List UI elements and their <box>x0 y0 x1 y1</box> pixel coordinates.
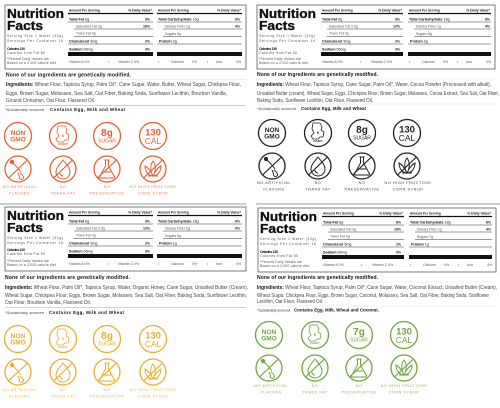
nutrition facts label: % Daily Value* <box>467 212 492 216</box>
icon captions: PRESERVATIVE <box>89 394 125 398</box>
ingredients: Ingredients: Wheat Flour, Tapioca Syrup, Palm Oil*, Cane Sugar, Water, Butter, Wheat Sugar, Chickpea Flour, <box>6 82 241 88</box>
gmo statement: None of our ingredients are genetically modified. <box>257 275 379 281</box>
icon captions <box>254 384 427 394</box>
nutrition facts label: • <box>361 263 363 267</box>
ingredients <box>5 282 248 308</box>
nutrition facts label: Vitamin A 0% <box>69 60 90 64</box>
icon row: certifications: 8g <box>356 125 368 136</box>
nutrition facts label: Calories from Fat 50 <box>7 252 45 256</box>
nutrition facts label: 0% <box>236 262 241 266</box>
icon row: certifications <box>4 122 166 150</box>
nutrition facts label: 6% <box>486 220 492 224</box>
icon row: certifications: K <box>62 134 65 138</box>
ingredients: Ingredients: Wheat Flour, Palm Oil*, Tapioca Syrup, Water, Organic Honey, Cane Sugar, Unsalted Butter (Cream), <box>5 285 248 291</box>
nutrition facts label: Total Fat 6g <box>69 18 89 22</box>
nutrition facts label: Dietary Fiber 1g <box>416 24 441 28</box>
nutrition facts label: Total Carbohydrate 18g <box>158 220 199 224</box>
icon row: certifications: K <box>314 333 317 337</box>
nutrition facts label: Cholesterol 5mg <box>323 242 352 246</box>
nutrition facts label: • <box>207 262 209 266</box>
nutrition facts label: Vitamin A 0% <box>69 262 90 266</box>
nutrition facts label: 9% <box>395 18 401 22</box>
icon row: certifications: DAIRY <box>313 139 323 143</box>
allergen statement: *Sustainably sourced <box>257 106 297 111</box>
nutrition facts label: Iron <box>216 262 222 266</box>
allergen statement: Contains Egg, Milk, Wheat and Coconut. <box>294 308 379 312</box>
icon row: certifications: GMO <box>10 340 26 346</box>
icon row: certifications: 7g <box>353 327 365 338</box>
icon captions: PRESERVATIVE <box>89 192 125 196</box>
nutrition facts label <box>5 5 246 69</box>
gmo statement: None of our ingredients are genetically modified. <box>6 72 132 78</box>
nutrition facts label: Trans Fat 0g <box>329 32 349 36</box>
nutrition facts label: Calories from Fat 50 <box>259 51 297 55</box>
nutrition facts label: 0% <box>443 60 448 64</box>
icon captions: NO HIGH FRUCTOSE <box>381 384 427 388</box>
gmo statement: None of our ingredients are genetically modified. <box>5 275 131 281</box>
icon captions: NO ARTIFICIAL <box>2 185 37 189</box>
nutrition facts label: Nutrition <box>259 6 316 21</box>
nutrition facts label: Servings Per Container 16 <box>259 39 315 43</box>
nutrition facts label: % Daily Value* <box>217 210 242 214</box>
ingredients <box>5 80 246 106</box>
nutrition facts label: • <box>410 263 412 267</box>
nutrition facts label: 4% <box>486 60 491 64</box>
nutrition facts label: Dietary Fiber 0g <box>165 226 190 230</box>
nutrition facts label: Serving Size 1 Wafer (33g) <box>7 34 63 38</box>
nutrition facts label: Sodium 85mg <box>323 250 347 254</box>
icon captions: CORN SYRUP <box>393 188 423 192</box>
nutrition facts label: Nutrition <box>260 209 317 224</box>
allergen statement <box>5 310 125 315</box>
icon row: certifications: K <box>62 337 65 341</box>
ingredients <box>257 79 499 104</box>
icon row: certifications: 130 <box>145 128 161 138</box>
nutrition facts label: Cholesterol 5mg <box>322 40 350 44</box>
nutrition facts label: 3% <box>395 48 401 52</box>
allergen statement: Contains Egg, Milk and Wheat <box>301 106 367 111</box>
nutrition facts label: Facts <box>7 18 43 33</box>
nutrition facts label: Calories from Fat 80 <box>7 51 45 55</box>
nutrition facts label: • <box>207 60 209 64</box>
nutrition facts label <box>258 208 496 272</box>
nutrition facts label: Amount Per Serving <box>409 8 440 12</box>
nutrition facts label: Calcium <box>171 60 184 64</box>
icon captions: NO <box>104 185 110 189</box>
nutrition facts label: Based on a 2,000 calorie diet. <box>7 61 57 65</box>
panel: bottom-left yellow nutrition facts <box>2 207 248 398</box>
nutrition facts label: Based on a 2,000 calorie diet. <box>259 61 309 65</box>
ingredients: Wheat Sugar, Chickpea Flour, Eggs, Brown Sugar, Molasses, Sea Salt, Oat Fiber, Baking Soda, Sunflower Lecithin, <box>5 293 247 299</box>
nutrition facts label: Amount Per Serving <box>69 8 100 12</box>
nutrition facts label: Total Fat 6g <box>322 18 342 22</box>
icon row: certifications: GMO <box>261 336 277 342</box>
nutrition facts label: Saturated Fat 3g <box>76 24 102 28</box>
icon row: certifications: 8g <box>101 331 113 342</box>
nutrition facts label: Sugars 8g <box>165 234 181 238</box>
nutrition facts label: 8% <box>396 220 402 224</box>
nutrition facts label: Vitamin C 0% <box>118 262 139 266</box>
nutrition facts label: 16% <box>143 24 151 28</box>
icon row: certifications: SUGAR <box>98 342 116 348</box>
nutrition facts label: Saturated Fat 3g <box>330 228 356 232</box>
icon captions: TRANS FAT <box>302 390 328 394</box>
nutrition facts label: 13% <box>393 24 401 28</box>
icon row: certifications: DAIRY <box>58 345 68 349</box>
nutrition facts label: Serving Size 1 Wafer (33g) <box>260 237 316 241</box>
icon captions <box>257 181 431 192</box>
icon captions: NO <box>315 181 321 185</box>
icon captions: FLAVORS <box>9 394 30 398</box>
nutrition facts label: Vitamin C 0% <box>118 60 139 64</box>
icon captions: NO ARTIFICIAL <box>2 388 37 392</box>
nutrition facts label: Trans Fat 0g <box>330 234 350 238</box>
nutrition facts label: Nutrition <box>7 6 64 21</box>
icon captions: NO <box>312 384 318 388</box>
nutrition facts label: 13% <box>143 226 151 230</box>
icon captions: CORN SYRUP <box>138 192 168 196</box>
icon row: certifications: CAL <box>145 136 162 146</box>
nutrition facts label: Amount Per Serving <box>158 210 189 214</box>
icon captions: NO <box>60 388 66 392</box>
nutrition facts label: 3% <box>145 48 151 52</box>
ingredients: Oat Flour, Bourbon Vanilla, Flaxseed Oil. <box>5 300 91 306</box>
nutrition facts label: Calcium <box>423 263 436 267</box>
nutrition facts label <box>257 5 495 69</box>
icon captions: NO <box>104 388 110 392</box>
nutrition facts label: • <box>158 262 160 266</box>
icon captions: FLAVORS <box>9 192 30 196</box>
nutrition facts label: Saturated Fat 2.5g <box>76 226 105 230</box>
ingredients <box>257 282 497 306</box>
nutrition facts label: Protein 2g <box>159 40 177 44</box>
nutrition facts label <box>5 207 246 271</box>
nutrition facts label: 2% <box>395 40 401 44</box>
nutrition facts label: Sugars 7g <box>417 235 433 239</box>
icon row: certifications: GMO <box>10 136 26 144</box>
nutrition facts label: Servings Per Container 16 <box>7 241 63 245</box>
nutrition facts label: Sodium 65mg <box>322 48 346 52</box>
icon captions: NO <box>60 185 66 189</box>
nutrition facts label: Cholesterol 5mg <box>69 242 98 246</box>
icon captions: NO HIGH FRUCTOSE <box>385 181 431 185</box>
nutrition facts label: 6% <box>485 18 491 22</box>
nutrition facts label: Servings Per Container 16 <box>7 39 63 43</box>
icon row: certifications: CAL <box>145 339 162 349</box>
icon row: certifications: NON <box>262 329 277 336</box>
ingredients: Baking Soda, Sunflower Lecithin, Oat Flour, Flaxseed Oil. <box>257 98 373 104</box>
icon captions: PRESERVATIVE <box>344 188 380 192</box>
nutrition facts label: 0% <box>444 263 449 267</box>
icon captions: CORN SYRUP <box>138 394 168 398</box>
nutrition facts label: % Daily Value* <box>378 8 403 12</box>
icon row: no additives <box>5 359 166 385</box>
icon row: certifications: 130 <box>396 326 412 338</box>
icon captions: NO HIGH FRUCTOSE <box>130 185 176 189</box>
icon captions: NO ARTIFICIAL <box>254 384 288 388</box>
nutrition facts label: 6% <box>235 18 241 22</box>
nutrition facts label: 9% <box>145 220 151 224</box>
nutrition facts label: Total Carbohydrate 16g <box>409 18 450 22</box>
icon row: certifications: K <box>317 131 320 135</box>
nutrition facts label: Calcium <box>422 60 435 64</box>
nutrition facts label: Based on a 2,000 calorie diet. <box>260 264 310 268</box>
allergen statement: *Sustainably sourced <box>257 308 291 312</box>
nutrition facts label: Calories from Fat 50 <box>260 254 298 258</box>
icon row: certifications: DAIRY <box>58 142 68 146</box>
icon row: certifications: DAIRY <box>310 341 320 345</box>
icon row: certifications: SUGAR <box>98 138 116 144</box>
allergen statement: Contains Egg, Milk and Wheat <box>49 310 125 315</box>
icon captions: TRANS FAT <box>50 394 76 398</box>
allergen statement: *Sustainably sourced <box>5 310 45 315</box>
icon row: certifications <box>4 326 166 352</box>
icon captions: FLAVORS <box>260 390 282 394</box>
nutrition facts label: Calories 130 <box>7 47 25 51</box>
nutrition facts label: Calcium <box>171 262 184 266</box>
nutrition facts label: % Daily Value* <box>217 8 242 12</box>
nutrition facts label: Amount Per Serving <box>410 212 441 216</box>
nutrition facts label: 4% <box>485 24 491 28</box>
nutrition facts label: Vitamin A 0% <box>323 263 344 267</box>
nutrition facts label: Dietary Fiber 1g <box>417 228 442 232</box>
nutrition facts label: Amount Per Serving <box>158 8 189 12</box>
nutrition facts label: • <box>457 60 459 64</box>
nutrition facts label: Trans Fat 0g <box>76 32 96 36</box>
nutrition facts label: 4% <box>235 24 241 28</box>
nutrition facts label: 4% <box>486 228 492 232</box>
nutrition facts label: Total Carbohydrate 18g <box>410 220 451 224</box>
nutrition facts label: 16% <box>394 228 402 232</box>
nutrition facts label: Total Carbohydrate 16g <box>158 18 199 22</box>
nutrition facts label: % Daily Value* <box>466 8 491 12</box>
nutrition facts label: 4% <box>236 60 241 64</box>
ingredients: Ground Cinnamon, Oat Flour, Flaxseed Oil. <box>6 98 95 104</box>
nutrition facts label: • <box>108 60 110 64</box>
panel: top-right black nutrition facts <box>256 5 500 204</box>
nutrition facts label: Protein 1g <box>159 242 177 246</box>
nutrition facts label: Sodium 65mg <box>69 48 93 52</box>
nutrition facts label: Sugars 8g <box>416 32 432 36</box>
nutrition facts label: 3% <box>145 250 151 254</box>
nutrition facts label: Iron <box>466 60 472 64</box>
icon row: certifications <box>256 322 418 348</box>
icon row: certifications: 8g <box>101 128 113 139</box>
icon captions: TRANS FAT <box>305 188 331 192</box>
nutrition facts label: 2% <box>396 242 402 246</box>
allergen statement <box>257 308 379 312</box>
nutrition facts label: Amount Per Serving <box>323 212 354 216</box>
nutrition facts label: Nutrition <box>7 208 64 223</box>
nutrition facts label: *Percent Daily Values are <box>260 260 302 264</box>
icon row: certifications: 130 <box>145 330 161 342</box>
icon captions: NO <box>356 384 362 388</box>
icon row: certifications: 130 <box>399 124 415 136</box>
icon captions: PRESERVATIVE <box>341 390 377 394</box>
icon row: certifications: GMO <box>264 134 280 140</box>
ingredients: Eggs, Brown Sugar, Molasses, Sea Salt, Oat Fiber, Baking Soda, Sunflower Lecithin, Bourbon Vanilla, <box>6 91 227 97</box>
nutrition facts label: • <box>409 60 411 64</box>
icon row: no additives <box>259 153 420 179</box>
nutrition facts label: 9% <box>145 18 151 22</box>
allergen statement <box>257 106 367 111</box>
nutrition facts label: Calories 130 <box>260 250 278 254</box>
nutrition facts label: Amount Per Serving <box>322 8 353 12</box>
icon captions: CORN SYRUP <box>389 390 419 394</box>
icon row: certifications: CAL <box>399 133 416 143</box>
icon row: no additives <box>5 156 166 182</box>
nutrition facts label: 0% <box>235 226 241 230</box>
icon row: certifications <box>258 120 420 146</box>
nutrition facts label: Protein 1g <box>411 242 429 246</box>
nutrition facts label: • <box>458 263 460 267</box>
nutrition facts label: 2% <box>145 242 151 246</box>
panel: top-left orange nutrition facts <box>0 5 246 204</box>
nutrition facts label: 0% <box>192 60 197 64</box>
ingredients: Lecithin, Oat Flour, Flaxseed Oil. <box>257 299 323 305</box>
nutrition facts label: Serving Size 1 Wafer (33g) <box>7 236 63 240</box>
nutrition facts label: Iron <box>467 263 473 267</box>
nutrition facts label: Vitamin C 0% <box>372 263 393 267</box>
icon captions: TRANS FAT <box>50 192 76 196</box>
nutrition facts label: Sodium 65mg <box>69 250 93 254</box>
nutrition facts label: Vitamin A 0% <box>322 60 343 64</box>
allergen statement <box>5 107 126 112</box>
nutrition facts label: 4% <box>487 263 492 267</box>
nutrition facts label: 0% <box>192 262 197 266</box>
icon row: certifications: NON <box>265 127 280 134</box>
icon row: certifications: SUGAR <box>353 136 371 142</box>
nutrition facts label: Amount Per Serving <box>69 210 100 214</box>
nutrition facts label: *Percent Daily Values are <box>7 57 49 61</box>
allergen statement: Contains Egg, Milk and Wheat <box>50 107 126 112</box>
nutrition facts label: Trans Fat 0g <box>76 234 96 238</box>
icon captions <box>2 388 176 398</box>
nutrition facts label: Calories 130 <box>259 47 277 51</box>
icon captions: NO <box>359 181 365 185</box>
nutrition facts label: Serving Size 1 Wafer (33g) <box>259 34 315 38</box>
nutrition facts label: % Daily Value* <box>128 8 153 12</box>
icon row: no additives <box>256 355 417 381</box>
icon captions <box>2 185 176 196</box>
nutrition facts label: Protein 2g <box>410 40 428 44</box>
nutrition facts label: Total Fat 6g <box>69 220 89 224</box>
nutrition facts label: 2% <box>145 40 151 44</box>
nutrition facts label: Vitamin C 0% <box>371 60 392 64</box>
panel: bottom-right green nutrition facts <box>254 208 497 394</box>
nutrition facts label: Saturated Fat 2.5g <box>329 24 358 28</box>
nutrition facts label: • <box>360 60 362 64</box>
nutrition facts label: 6% <box>235 220 241 224</box>
icon row: certifications: NON <box>11 130 26 137</box>
nutrition facts label: Facts <box>259 18 295 33</box>
nutrition facts label: Servings Per Container 16 <box>260 242 316 246</box>
nutrition facts label: Iron <box>216 60 222 64</box>
nutrition facts label: • <box>108 262 110 266</box>
nutrition facts label: Sugars 8g <box>165 32 181 36</box>
nutrition facts label: Dietary Fiber 1g <box>165 24 190 28</box>
nutrition facts label: Facts <box>7 220 43 235</box>
icon captions: NO ARTIFICIAL <box>257 181 291 185</box>
nutrition facts label: *Percent Daily Values are <box>259 57 301 61</box>
icon captions: FLAVORS <box>263 188 285 192</box>
nutrition facts label: Cholesterol 5mg <box>69 40 98 44</box>
nutrition facts label: Based on a 2,000 calorie diet. <box>7 263 57 267</box>
icon row: certifications: SUGAR <box>350 338 368 344</box>
nutrition facts label: 3% <box>396 250 402 254</box>
nutrition facts label: Calories 120 <box>7 248 25 252</box>
gmo statement: None of our ingredients are genetically modified. <box>257 72 379 78</box>
nutrition facts label: • <box>158 60 160 64</box>
allergen statement: *Sustainably sourced <box>5 107 45 112</box>
nutrition facts label: Total Fat 6g <box>323 220 343 224</box>
nutrition facts label: % Daily Value* <box>128 210 153 214</box>
nutrition facts label: % Daily Value* <box>379 212 404 216</box>
nutrition facts label: Facts <box>260 221 296 236</box>
icon row: certifications: CAL <box>396 335 413 345</box>
nutrition facts label: *Percent Daily Values are <box>7 259 49 263</box>
icon captions: NO HIGH FRUCTOSE <box>130 388 176 392</box>
icon row: certifications: NON <box>11 333 26 340</box>
